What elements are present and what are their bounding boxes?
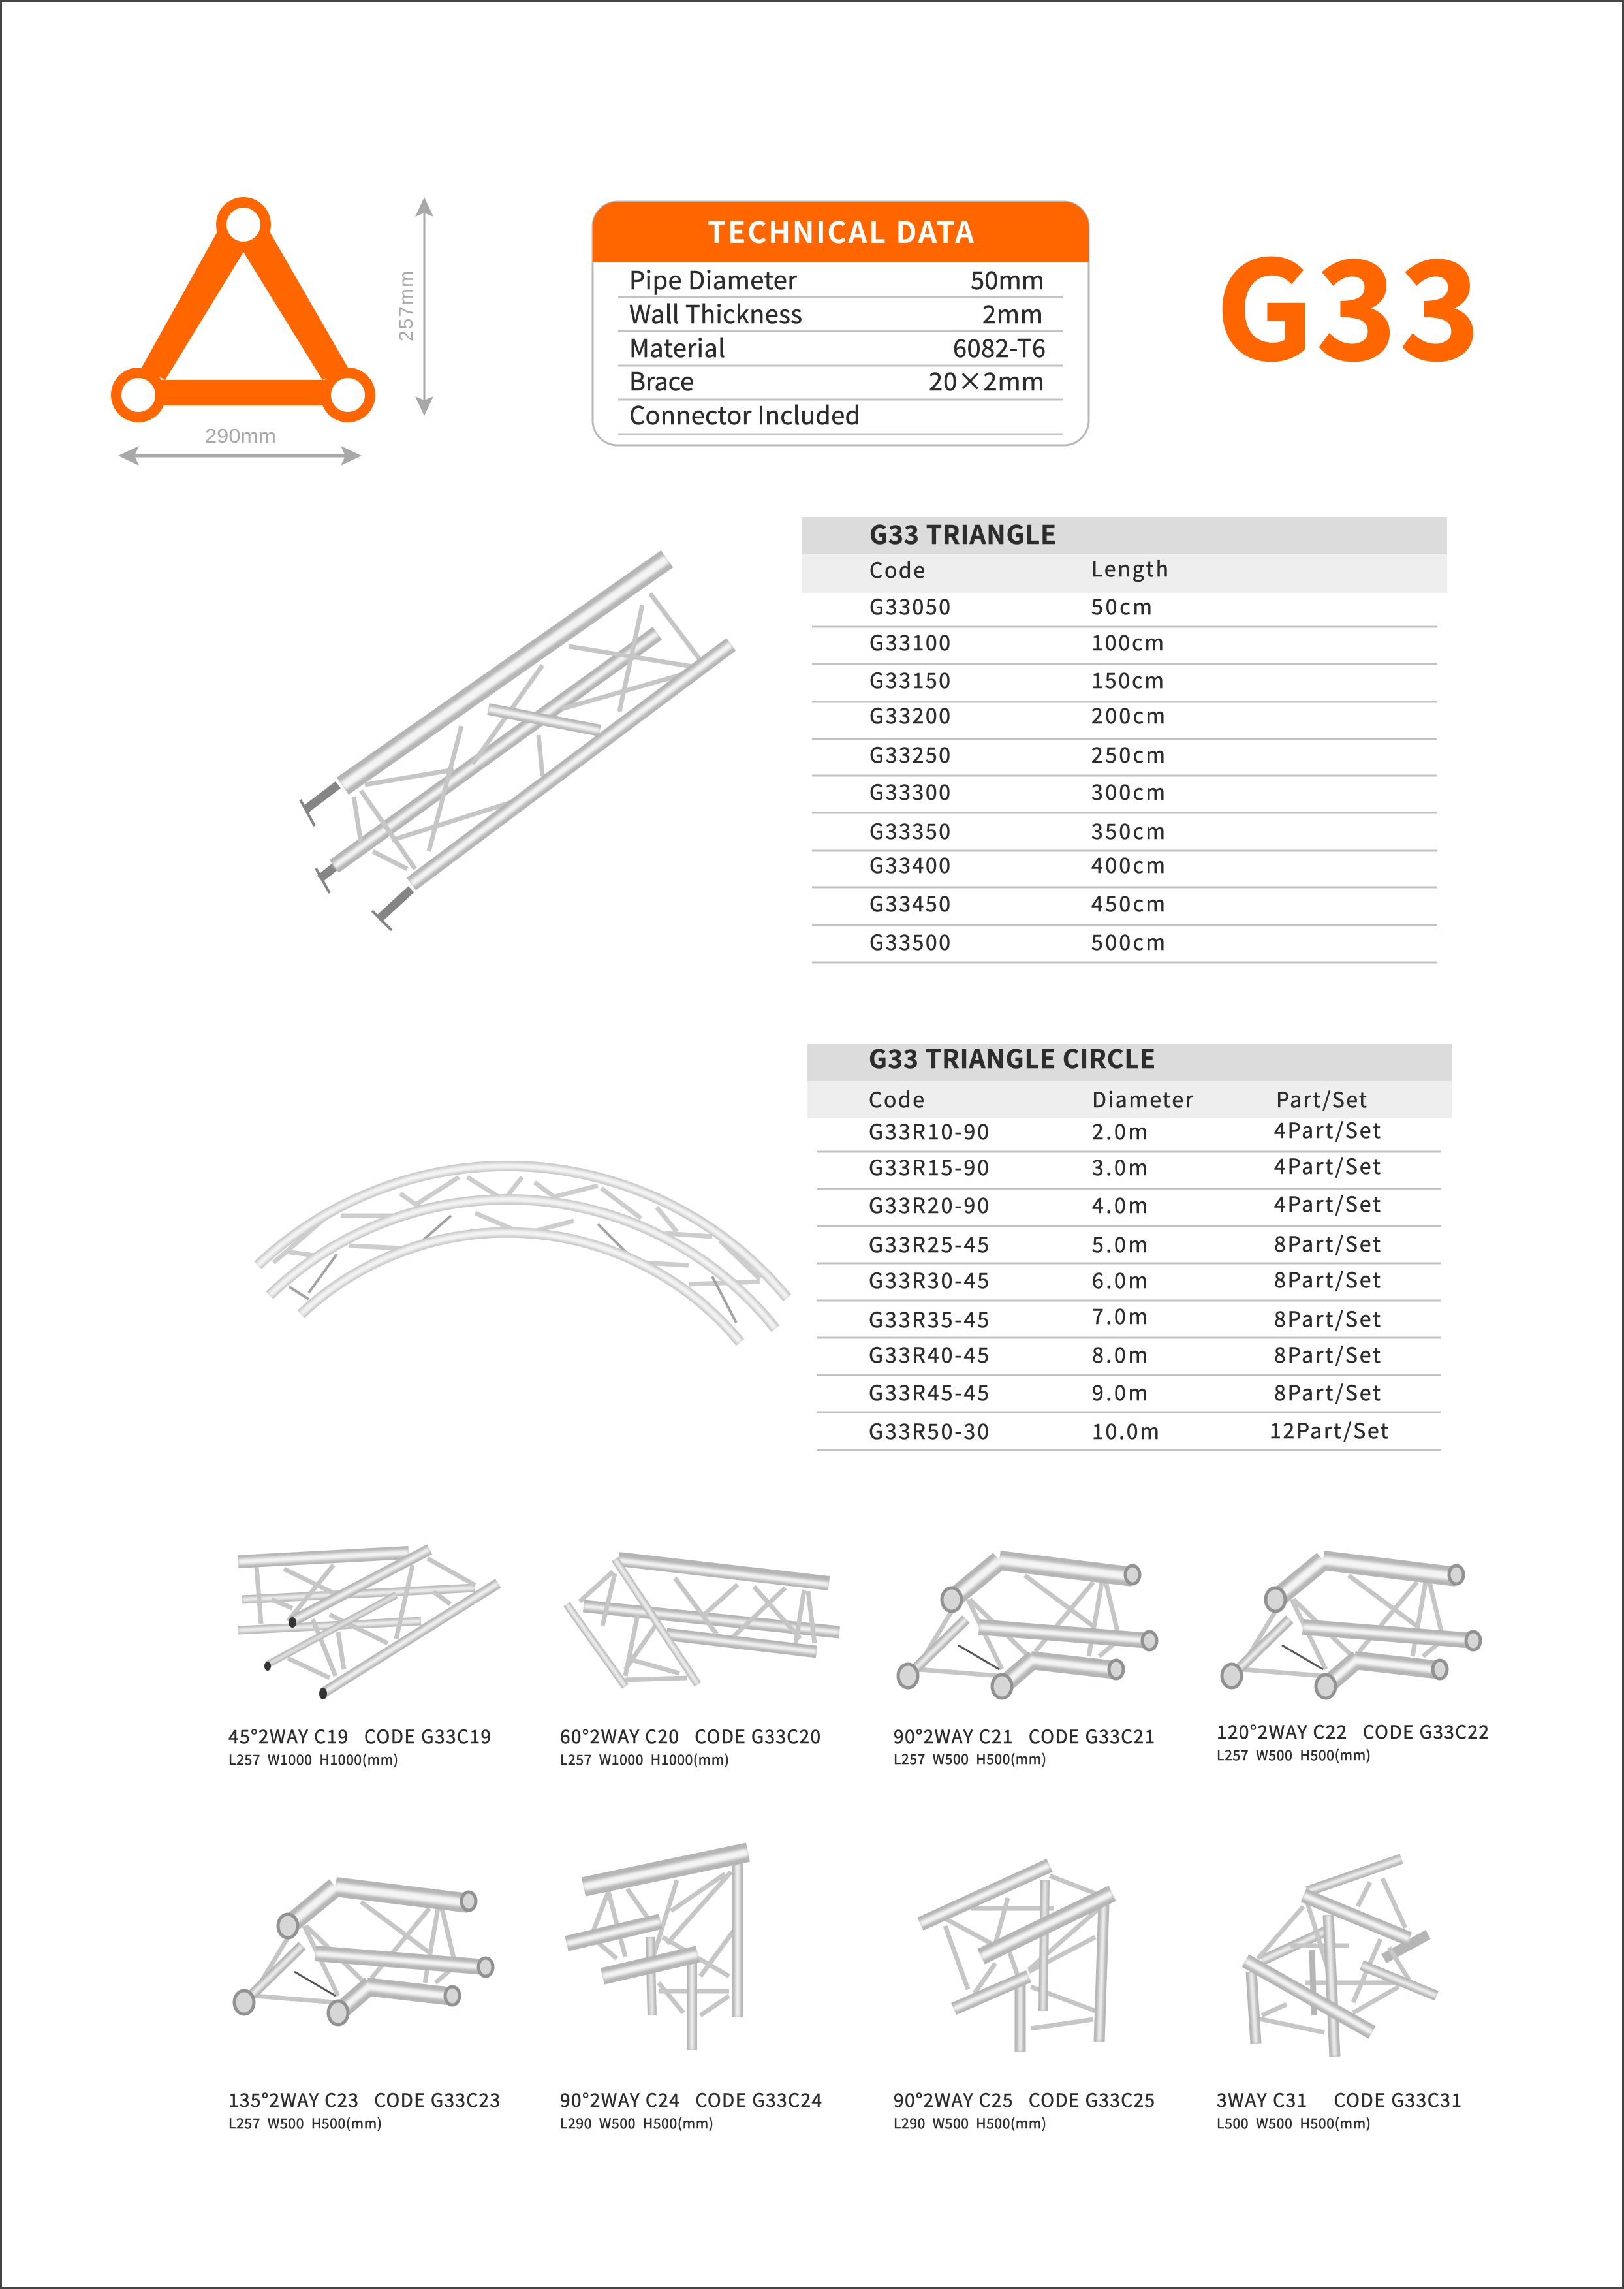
- caption: C19: [228, 1723, 491, 1769]
- technical data rows: Pipe Diameter: [629, 260, 797, 296]
- arrow: height dimension 257mm: 257mm: [396, 271, 417, 341]
- image: corner C21: [898, 1560, 1157, 1698]
- heading: technical data: TECHNICAL DATA: [708, 209, 975, 251]
- table: G33 triangle circle sizes: G33R35-45: [869, 1304, 989, 1334]
- table heading: G33 triangle: G33 TRIANGLE: [869, 515, 1056, 552]
- table: G33 triangle circle sizes: G33R50-30: [869, 1415, 989, 1445]
- caption: C21: L257 W500 H500(mm): [894, 1749, 1046, 1769]
- table: G33 triangle circle sizes: 8Part/Set: [1274, 1339, 1381, 1369]
- table: G33 triangle lengths: G33250: [869, 739, 950, 769]
- image: corner C24: [567, 1852, 748, 2050]
- image: curved triangle truss: [258, 1166, 787, 1342]
- table: G33 triangle circle sizes: G33R15-90: [869, 1152, 989, 1182]
- table: G33 triangle circle sizes: 8Part/Set: [1274, 1303, 1381, 1333]
- table: G33 triangle circle sizes: 4Part/Set: [1274, 1114, 1381, 1144]
- table: G33 triangle lengths: 500cm: [1091, 926, 1165, 956]
- table: G33 triangle circle sizes: G33R40-45: [869, 1339, 989, 1369]
- caption: C21: 90°2WAY C21 CODE G33C21: [894, 1723, 1155, 1749]
- arrow: width dimension 290mm: [118, 424, 362, 466]
- table: G33 triangle circle sizes: 2.0m: [1092, 1116, 1148, 1146]
- table: G33 triangle lengths: 300cm: [1091, 776, 1165, 806]
- table: G33 triangle circle sizes: 5.0m: [1092, 1229, 1148, 1259]
- caption: C20: L257 W1000 H1000(mm): [560, 1750, 729, 1769]
- table: G33 triangle lengths: [812, 591, 1437, 962]
- technical data rows: 2mm: [982, 294, 1043, 330]
- caption: C25: L290 W500 H500(mm): [894, 2113, 1046, 2133]
- table heading: G33 triangle circle: [807, 1039, 1452, 1118]
- image: corner C23: [234, 1887, 493, 2025]
- image: corner C20: [567, 1559, 839, 1686]
- technical data rows: 6082-T6: [953, 328, 1046, 364]
- table: G33 triangle lengths: G33050: [869, 591, 950, 621]
- caption: C24: 90°2WAY C24 CODE G33C24: [560, 2087, 822, 2113]
- table heading: G33 triangle: Code: [869, 554, 925, 584]
- image: straight triangle truss: [300, 559, 731, 930]
- table: G33 triangle circle sizes: G33R20-90: [869, 1190, 989, 1220]
- table: G33 triangle lengths: G33150: [869, 665, 950, 695]
- table: G33 triangle circle sizes: 4Part/Set: [1274, 1188, 1381, 1218]
- table: G33 triangle lengths: G33350: [869, 815, 950, 845]
- table: G33 triangle circle sizes: 8Part/Set: [1274, 1377, 1381, 1407]
- table: G33 triangle lengths: G33300: [869, 776, 950, 806]
- table: G33 triangle lengths: G33400: [869, 849, 950, 879]
- table heading: G33 triangle circle: G33 TRIANGLE CIRCLE: [869, 1039, 1155, 1076]
- caption: C19: L257 W1000 H1000(mm): [228, 1750, 398, 1769]
- table: G33 triangle circle sizes: G33R25-45: [869, 1229, 989, 1259]
- caption: C20: 60°2WAY C20 CODE G33C20: [560, 1723, 820, 1749]
- table: G33 triangle lengths: 150cm: [1091, 665, 1164, 695]
- technical data rows: 20×2mm: [929, 362, 1044, 398]
- caption: C23: 135°2WAY C23 CODE G33C23: [228, 2087, 500, 2113]
- caption: C22: 120°2WAY C22 CODE G33C22: [1217, 1718, 1489, 1744]
- caption: C24: L290 W500 H500(mm): [560, 2113, 713, 2133]
- table: G33 triangle circle sizes: 9.0m: [1092, 1377, 1148, 1407]
- arrow: height dimension 257mm: [396, 197, 433, 416]
- table: G33 triangle lengths: 250cm: [1091, 739, 1165, 769]
- caption: C25: [894, 2087, 1155, 2133]
- table: G33 triangle lengths: G33450: [869, 888, 950, 918]
- table: G33 triangle circle sizes: 3.0m: [1092, 1152, 1148, 1182]
- table: G33 triangle circle sizes: 8.0m: [1092, 1339, 1148, 1369]
- table: G33 triangle lengths: G33100: [869, 627, 950, 657]
- table: G33 triangle circle sizes: G33R10-90: [869, 1116, 989, 1146]
- caption: C31: [1217, 2087, 1461, 2133]
- table heading: G33 triangle: Length: [1091, 553, 1168, 583]
- technical data rows: [618, 260, 1063, 434]
- caption: C22: [1217, 1718, 1489, 1765]
- caption: C19: 45°2WAY C19 CODE G33C19: [228, 1723, 491, 1749]
- table heading: G33 triangle circle: Diameter: [1092, 1084, 1194, 1114]
- table: G33 triangle circle sizes: 6.0m: [1092, 1265, 1148, 1295]
- table: G33 triangle circle sizes: 7.0m: [1092, 1301, 1148, 1331]
- image: corner C19: [238, 1549, 498, 1699]
- technical data rows: 50mm: [971, 260, 1044, 296]
- caption: C31: 3WAY C31 CODE G33C31: [1217, 2087, 1461, 2113]
- table: G33 triangle circle sizes: G33R45-45: [869, 1377, 989, 1407]
- caption: C20: [560, 1723, 820, 1769]
- caption: C24: [560, 2087, 822, 2133]
- table: G33 triangle lengths: G33500: [869, 926, 950, 956]
- table: G33 triangle lengths: 450cm: [1091, 888, 1165, 918]
- table: G33 triangle lengths: 400cm: [1091, 849, 1165, 879]
- table: G33 triangle circle sizes: [817, 1114, 1441, 1450]
- table: G33 triangle circle sizes: 8Part/Set: [1274, 1228, 1381, 1258]
- caption: C31: L500 W500 H500(mm): [1217, 2113, 1371, 2133]
- technical data rows: Brace: [629, 362, 694, 398]
- table: G33 triangle circle sizes: 10.0m: [1092, 1415, 1159, 1445]
- table: G33 triangle circle sizes: 12Part/Set: [1270, 1415, 1388, 1445]
- arrow: width dimension 290mm: 290mm: [205, 424, 276, 447]
- table heading: G33 triangle: [802, 515, 1447, 593]
- table: G33 triangle circle sizes: 4Part/Set: [1274, 1150, 1381, 1180]
- technical data rows: Connector Included: [629, 396, 860, 432]
- table: G33 triangle circle sizes: 8Part/Set: [1274, 1264, 1381, 1294]
- table heading: G33 triangle circle: Part/Set: [1276, 1084, 1367, 1114]
- table: G33 triangle lengths: 350cm: [1091, 815, 1165, 845]
- technical data rows: Wall Thickness: [629, 294, 802, 330]
- table: G33 triangle lengths: 100cm: [1091, 627, 1164, 657]
- caption: C23: [228, 2087, 500, 2133]
- table: G33 triangle circle sizes: G33R30-45: [869, 1265, 989, 1295]
- caption: C21: [894, 1723, 1155, 1769]
- caption: C25: 90°2WAY C25 CODE G33C25: [894, 2087, 1155, 2113]
- title: G33: G33: [1216, 202, 1480, 398]
- panel: technical data: [593, 202, 1089, 445]
- image: corner C31: [1245, 1859, 1437, 2057]
- caption: C22: L257 W500 H500(mm): [1217, 1745, 1371, 1765]
- table: G33 triangle lengths: G33200: [869, 700, 950, 730]
- technical data rows: Material: [629, 328, 725, 364]
- icon: orange triangle truss cross-section: [111, 197, 375, 422]
- table: G33 triangle lengths: 50cm: [1091, 591, 1152, 621]
- caption: C23: L257 W500 H500(mm): [228, 2113, 382, 2133]
- image: corner C22: [1222, 1560, 1480, 1698]
- table: G33 triangle lengths: 200cm: [1091, 700, 1165, 730]
- table heading: G33 triangle circle: Code: [869, 1084, 924, 1114]
- table: G33 triangle circle sizes: 4.0m: [1092, 1190, 1148, 1220]
- image: corner C25: [920, 1865, 1112, 2052]
